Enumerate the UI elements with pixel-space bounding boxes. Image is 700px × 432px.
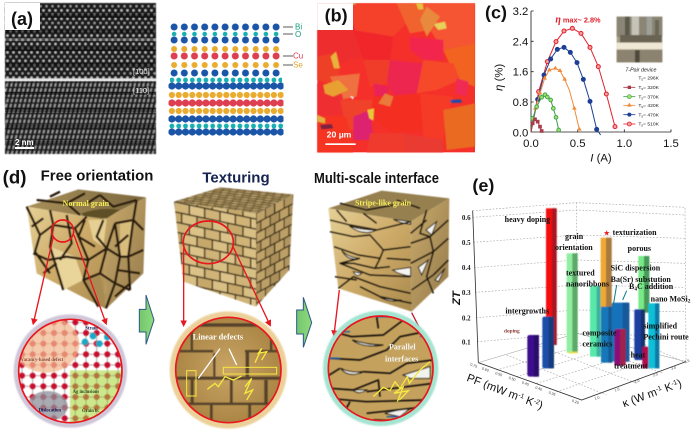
bar annotations: simplified (643, 321, 678, 330)
ZT tick labels: 0.2 (462, 314, 471, 322)
zoom ring on cube (183, 221, 233, 264)
panel c: efficiency line chart: 0.5 (570, 138, 586, 150)
bar annotations: heat (631, 350, 646, 359)
axes (531, 11, 671, 132)
panel d: multi-scale interface stage (314, 171, 449, 426)
lattice defect captions: Grain b. (82, 409, 99, 414)
parallel interfaces callout: Parallel (389, 342, 416, 351)
legend: s (641, 105, 643, 109)
zone axis labels (133, 67, 150, 95)
zoom arrows (334, 290, 424, 337)
axis tick labels (513, 6, 528, 139)
heading: texturing: Texturing (202, 171, 270, 187)
bar annotations: Pechini route (643, 333, 689, 342)
floor tick labels: 3.0 (671, 365, 677, 371)
legend: = 510K (643, 122, 660, 128)
panel e: 3D bar chart of ZT: -1 (670, 379, 679, 388)
panel c: efficiency line chart: 1.5 (663, 138, 679, 150)
legend: T (638, 76, 641, 82)
lattice defect captions: Ag inclusions (73, 390, 99, 395)
floor tick labels: 0.20 (571, 399, 579, 405)
floor tick labels: 0.35 (548, 391, 556, 397)
bar annotations: intergrowths (505, 307, 549, 316)
atom legend (283, 22, 303, 70)
panel e: 3D bar chart of ZT (451, 175, 691, 412)
floor tick labels (470, 359, 690, 405)
phonon path (373, 362, 430, 402)
bar annotations: C addition (637, 282, 674, 291)
panel b: grain orientation map (317, 3, 475, 152)
axis frame (473, 211, 686, 400)
ZT tick labels: 0.3 (462, 289, 471, 297)
panel e: 3D bar chart of ZT: K (660, 381, 675, 396)
panel d: texturing stage (170, 171, 293, 429)
legend: = 296K (643, 76, 660, 82)
curve 420 K (531, 66, 582, 132)
zoom ring on cube (52, 220, 74, 242)
floor tick labels: 2.5 (652, 372, 658, 378)
panel label d: (d) (3, 166, 26, 187)
bar annotations: Ba(Sr) substution (611, 275, 671, 284)
bar annotations: doping (504, 329, 520, 335)
panel a: crystal structure atom rows (168, 22, 303, 136)
legend: s (641, 78, 643, 82)
bar annotations: texturization (613, 228, 657, 237)
ZT tick labels: 0.5 (462, 239, 471, 247)
ZT tick labels: 0.4 (462, 264, 471, 272)
peak annotation: η max~ 2.8% (555, 14, 601, 25)
cube caption: Stripe-like grain (355, 199, 412, 208)
legend: s (641, 87, 643, 91)
bar annotations: 4 (634, 286, 637, 292)
heading: multi-scale interface: Multi-scale interface (314, 171, 439, 187)
panel label b (317, 3, 353, 30)
legend: T (638, 112, 641, 118)
floor tick labels: 1.0 (594, 395, 600, 401)
axis tick labels: 2.4 (513, 36, 528, 48)
bar annotations: treatment (614, 362, 648, 371)
floor tick labels: 0.45 (521, 381, 529, 387)
atom legend: O (295, 30, 301, 39)
bar annotations: nano MoSi (651, 294, 688, 303)
floor tick labels: 3.5 (684, 359, 690, 364)
curve 510 K (531, 26, 617, 132)
scale bar 2 nm: 2 nm (15, 138, 34, 147)
bar annotations: composite (582, 329, 617, 338)
legend: s (641, 96, 643, 100)
panel e: 3D bar chart of ZT: ) (676, 378, 684, 390)
zoom arrows (184, 247, 270, 325)
legend: = 370K (643, 94, 660, 100)
heading: free orientation: Free orientation (41, 169, 153, 185)
legend: 7-Pair device (625, 67, 656, 73)
atom legend: Bi (295, 22, 302, 32)
panel e: 3D bar chart of ZT: -1 (655, 385, 663, 393)
legend: T (638, 85, 641, 91)
legend: = 320K (643, 85, 660, 91)
floor tick labels: 0.50 (508, 376, 516, 382)
cube: brick grains (174, 187, 293, 307)
legend: s (641, 114, 643, 118)
parallel interfaces callout (385, 342, 418, 363)
floor tick labels: 1.5 (614, 387, 620, 393)
axis tick labels: 0.8 (513, 97, 528, 109)
legend: T (638, 122, 641, 128)
floor tick labels: 0.60 (481, 367, 489, 373)
panel e: 3D bar chart of ZT: PF (mW m (465, 372, 520, 403)
parallel interfaces callout: interfaces (385, 354, 418, 363)
floor tick labels: 0.40 (535, 386, 543, 392)
lattice defect captions: Vacancy-based defect (21, 358, 64, 363)
magnified stripe circle (323, 311, 438, 426)
device photo (617, 17, 662, 62)
floor tick labels: 0.55 (495, 371, 503, 377)
scale bar 20 µm: 20 µm (327, 130, 352, 140)
panel d: free orientation stage (3, 166, 153, 428)
arrow: texturing to multi-scale interface (297, 297, 312, 347)
bar annotations: heavy doping (505, 215, 550, 224)
cube: stripe-like grain (328, 191, 449, 312)
lattice defect captions: Strain (85, 326, 98, 331)
legend: = 420K (643, 103, 660, 109)
bar annotations: orientation (555, 243, 593, 252)
magnified lattice circle (13, 314, 127, 428)
annotation leader (613, 285, 627, 305)
bar annotations: textured (566, 269, 595, 278)
axis tick labels: 1.6 (513, 67, 528, 79)
lattice defect captions: Dislocation (39, 409, 61, 414)
floor tick labels: 2.0 (634, 379, 640, 384)
panel c: efficiency line chart: 1.0 (616, 138, 632, 150)
bar annotations: 2 (688, 299, 691, 305)
bars (527, 208, 659, 377)
star marker: ★ (603, 229, 610, 238)
panel a: electron micrograph (5, 3, 156, 154)
panel e: 3D bar chart of ZT: κ (W m (621, 387, 659, 410)
magnified brick circle (170, 311, 290, 429)
3D axes and grid (473, 203, 686, 395)
ZT tick labels: 0.1 (462, 338, 471, 346)
floor tick labels: 0.75 (470, 363, 478, 369)
atom legend: Cu (293, 52, 303, 60)
panel label a: (a) (11, 9, 33, 29)
legend (623, 67, 660, 128)
legend: T (638, 103, 641, 109)
panel c: efficiency line chart: η (%) (494, 64, 506, 91)
bar annotations: nanoribbons (566, 280, 609, 289)
zone axis labels: [110] (133, 86, 149, 95)
bar annotations: ceramics (582, 340, 612, 349)
zoom arrows (33, 235, 106, 323)
panel label c: (c) (485, 2, 507, 22)
panel label a (5, 3, 40, 30)
lattice defect captions (21, 326, 99, 414)
zone axis labels: [100] (133, 67, 150, 76)
scale bar 20 µm (325, 130, 356, 145)
panel c: efficiency line chart: I (A) (590, 152, 612, 164)
axis tick labels: 3.2 (513, 6, 528, 18)
panel e: 3D bar chart of ZT: -1 (517, 392, 525, 401)
bar annotations: grain (565, 232, 584, 241)
panel e: 3D bar chart of ZT: -2 (533, 398, 541, 407)
atom legend: Se (293, 60, 303, 70)
ZT tick labels (462, 214, 471, 346)
panel e: 3D bar chart of ZT: ) (536, 400, 545, 412)
curve 320 K (531, 118, 543, 132)
axis titles: ZT (451, 290, 463, 306)
cube caption: Normal grain (63, 199, 110, 208)
panel label e: (e) (472, 175, 494, 195)
axis tick labels: 0.0 (513, 127, 528, 139)
bar annotations: SiC dispersion (611, 264, 661, 273)
cube: normal grain (27, 189, 146, 309)
panel c: efficiency line chart: 0.0 (523, 138, 539, 150)
legend: T (638, 94, 641, 100)
curve 370 K (531, 93, 560, 132)
panel label b: (b) (325, 6, 348, 26)
linear defects callout: Linear defects (193, 332, 244, 341)
bar annotations: B (629, 282, 634, 291)
bar annotations: porous (628, 244, 651, 253)
legend: s (641, 124, 643, 128)
curve 470 K (531, 45, 601, 135)
arrow: free orientation to texturing (139, 295, 154, 344)
bar annotations (504, 215, 691, 371)
ZT tick labels: 0.6 (462, 214, 471, 222)
legend: = 470K (643, 112, 660, 118)
panel c: efficiency line chart (485, 2, 679, 164)
panel e: 3D bar chart of ZT: K (521, 394, 536, 409)
